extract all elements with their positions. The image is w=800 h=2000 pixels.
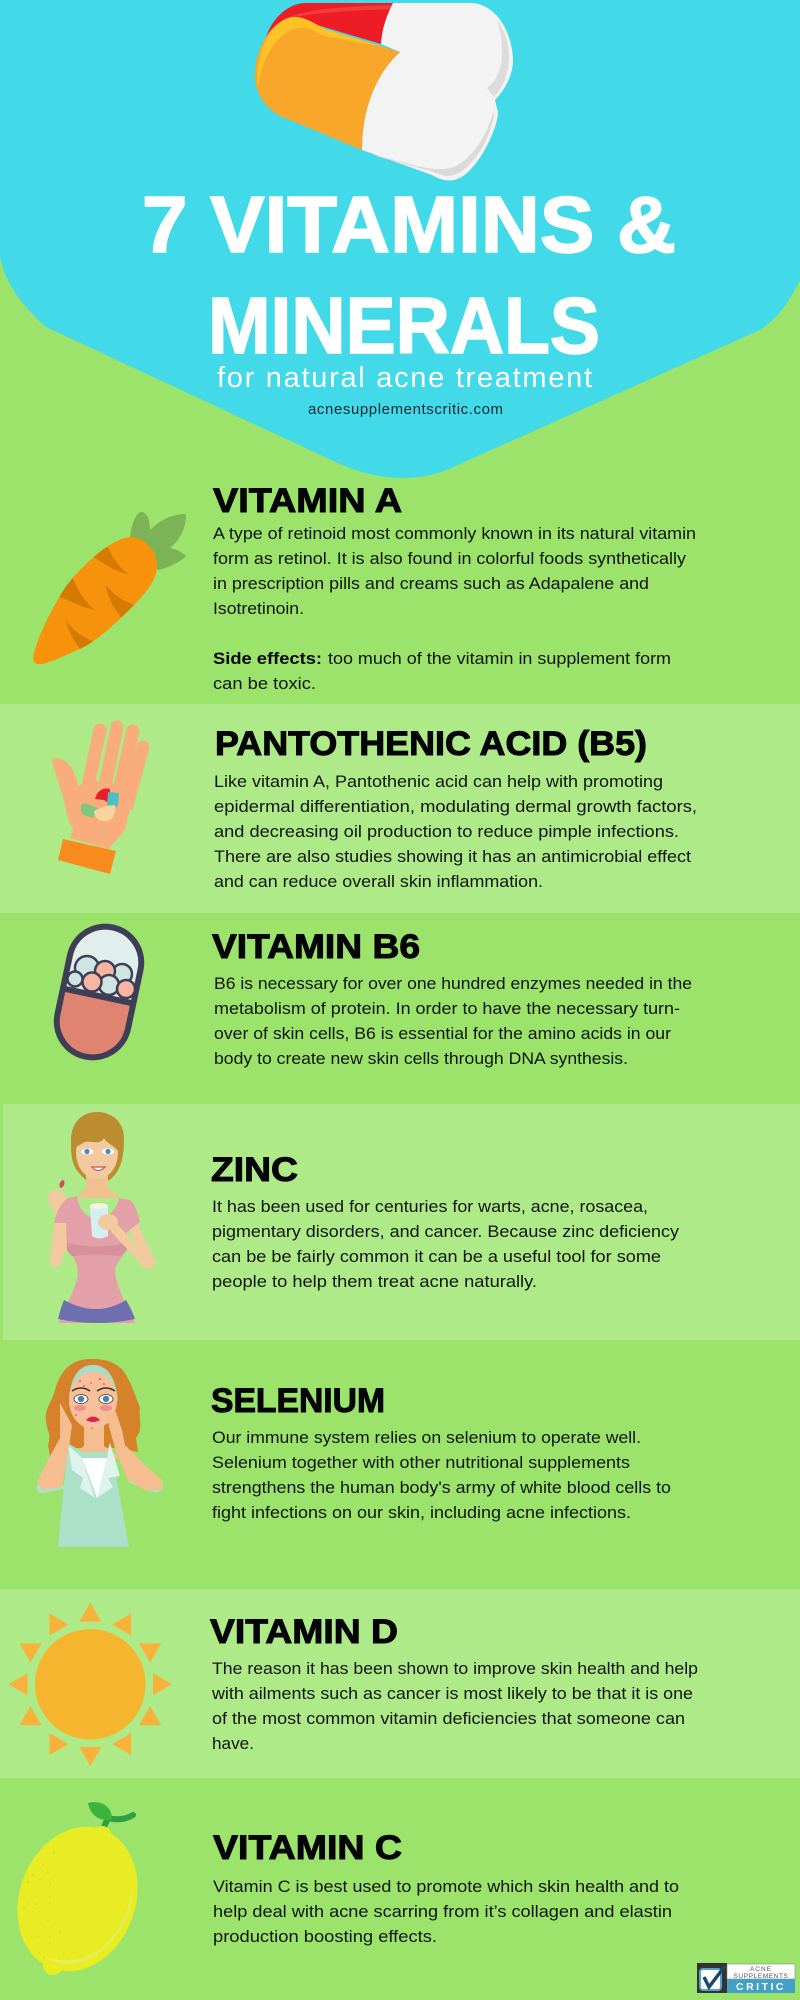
icon: sun: [9, 1603, 172, 1766]
text: vitamin A description: in prescription pills and creams such as Adapalene and: [213, 574, 649, 593]
panel: zinc: [3, 1104, 800, 1340]
panel: vitamin B6: [0, 913, 800, 1104]
text: zinc description: can be be fairly common it can be a useful tool for some: [212, 1247, 661, 1266]
icon: carrot: [33, 512, 186, 664]
icon: lemon: [0, 1802, 157, 1988]
logo: acne supplements critic: SUPPLEMENTS: [733, 1973, 789, 1980]
title: MINERALS: [208, 281, 600, 370]
heading: vitamin D: VITAMIN D: [210, 1613, 398, 1651]
heading: selenium: SELENIUM: [211, 1382, 385, 1420]
text: pantothenic acid description: There are also studies showing it has an antimicrobial effect: [214, 847, 691, 866]
text: vitamin A description: A type of retinoid most commonly known in its natural vitamin: [213, 524, 696, 543]
panel: selenium: [0, 1340, 800, 1589]
text: vitamin D description: of the most common vitamin deficiencies that someone can: [212, 1709, 685, 1728]
panel: vitamin A: [33, 488, 695, 689]
heading: vitamin B6: VITAMIN B6: [212, 928, 420, 966]
title: [142, 180, 676, 370]
text: zinc description: people to help them treat acne naturally.: [212, 1272, 537, 1291]
panel: vitamin C: [0, 1778, 800, 2000]
text: zinc description: pigmentary disorders, and cancer. Because zinc deficiency: [212, 1222, 680, 1241]
text: vitamin B6 description: metabolism of protein. In order to have the necessary turn-: [214, 999, 680, 1018]
text: selenium description: Our immune system relies on selenium to operate well.: [212, 1428, 641, 1447]
icon: woman with acne: [36, 1359, 163, 1547]
subtitle: for natural acne treatment: [217, 362, 592, 394]
text: vitamin D description: The reason it has been shown to improve skin health and help: [212, 1659, 698, 1678]
text: vitamin B6 description: body to create new skin cells through DNA synthesis.: [214, 1049, 628, 1068]
text: vitamin D description: have.: [212, 1734, 254, 1753]
logo: acne supplements critic: CRITIC: [736, 1981, 786, 1993]
text: selenium description: [212, 1428, 671, 1522]
text: side effects: can be toxic.: [213, 674, 316, 693]
text: vitamin C description: help deal with acne scarring from it’s collagen and elastin: [213, 1902, 672, 1921]
icon: hand holding pills: [52, 727, 143, 874]
text: zinc description: [212, 1197, 680, 1291]
text: vitamin B6 description: B6 is necessary for over one hundred enzymes needed in the: [214, 974, 692, 993]
text: selenium description: strengthens the human body's army of white blood cells to: [212, 1478, 671, 1497]
heading: vitamin A: VITAMIN A: [213, 482, 402, 520]
icon: capsule pill: [255, 3, 513, 180]
logo: acne supplements critic: [697, 1963, 795, 1993]
icon: woman taking pill with water: [45, 1112, 150, 1323]
heading: pantothenic acid: PANTOTHENIC ACID (B5): [215, 725, 647, 763]
text: pantothenic acid description: and decreasing oil production to reduce pimple infections.: [214, 822, 679, 841]
text: vitamin D description: [211, 1659, 698, 1753]
text: vitamin A description: [213, 524, 696, 618]
header: blue banner with title: [0, 0, 800, 478]
heading: zinc: ZINC: [211, 1151, 298, 1189]
text: vitamin C description: [213, 1877, 679, 1946]
text: vitamin B6 description: over of skin cells, B6 is essential for the amino acids in our: [214, 1024, 671, 1043]
text: side effects: [213, 649, 671, 693]
text: vitamin A description: form as retinol. It is also found in colorful foods synthetically: [213, 549, 687, 568]
logo: acne supplements critic: ACNE: [750, 1966, 772, 1973]
text: vitamin B6 description: [214, 974, 692, 1068]
text: vitamin D description: with ailments such as cancer is most likely to be that it is one: [211, 1684, 693, 1703]
panel: vitamin D: [0, 1589, 800, 1778]
text: vitamin C description: production boosting effects.: [213, 1927, 437, 1946]
title: 7 VITAMINS &: [142, 180, 676, 269]
icon: capsule with pills: [50, 920, 148, 1064]
heading: vitamin C: VITAMIN C: [213, 1829, 402, 1867]
text: vitamin A description: Isotretinoin.: [213, 599, 304, 618]
text: pantothenic acid description: Like vitamin A, Pantothenic acid can help with promoting: [214, 772, 663, 791]
text: side effects: Side effects:: [213, 649, 322, 668]
text: vitamin C description: Vitamin C is best used to promote which skin health and to: [213, 1877, 679, 1896]
text: selenium description: Selenium together with other nutritional supplements: [212, 1453, 630, 1472]
website: acnesupplementscritic.com: [308, 401, 503, 418]
text: pantothenic acid description: epidermal differentiation, modulating dermal growth factors,: [214, 797, 697, 816]
text: pantothenic acid description: and can reduce overall skin inflammation.: [214, 872, 543, 891]
text: side effects: too much of the vitamin in supplement form: [328, 649, 671, 668]
text: pantothenic acid description: [214, 772, 697, 891]
text: selenium description: fight infections on our skin, including acne infections.: [212, 1503, 631, 1522]
text: zinc description: It has been used for centuries for warts, acne, rosacea,: [212, 1197, 648, 1216]
panel: pantothenic acid: [0, 704, 800, 913]
